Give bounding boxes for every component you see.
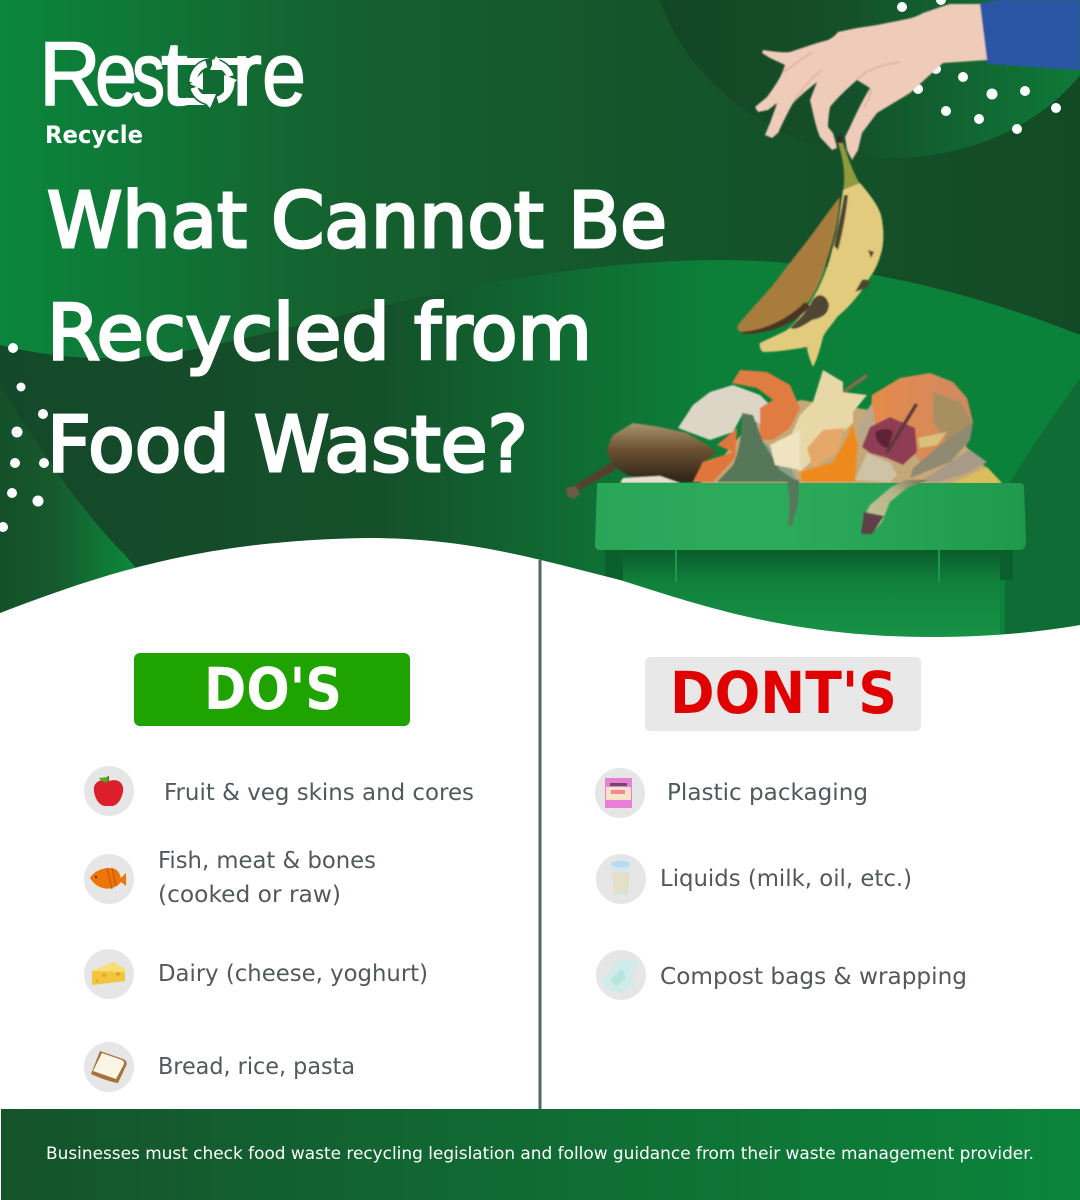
center divider <box>538 560 542 1110</box>
illustration: hand holding banana peel <box>737 0 1080 367</box>
dots: left <box>0 343 49 532</box>
item: compost bags: Compost bags & wrapping <box>660 962 967 990</box>
item: bread <box>84 1042 355 1092</box>
don'ts badge: DONT'S <box>670 659 897 727</box>
do's badge <box>134 653 410 726</box>
item: plastic packaging <box>595 768 868 818</box>
logo: Restore Recycle: s <box>132 24 165 125</box>
logo: Restore Recycle: e <box>262 24 306 125</box>
white lower panel <box>0 538 1080 1200</box>
do's badge: DO'S <box>204 655 342 723</box>
item: compost bags <box>596 950 967 1000</box>
title: Recycled from <box>47 289 592 378</box>
title: Food Waste? <box>47 401 528 490</box>
illustration: food scraps in bin <box>566 370 1002 522</box>
header background <box>0 0 1080 640</box>
item: liquids: Liquids (milk, oil, etc.) <box>660 864 912 892</box>
logo: Restore Recycle <box>39 24 306 149</box>
item: bread: Bread, rice, pasta <box>158 1052 355 1080</box>
logo: Restore Recycle: Recycle <box>45 121 143 149</box>
item: dairy: Dairy (cheese, yoghurt) <box>158 959 428 987</box>
item: fish and meat: Fish, meat & bones <box>158 846 376 874</box>
item: fruit and veg: Fruit & veg skins and cores <box>164 778 474 806</box>
logo: Restore Recycle: t <box>161 24 188 125</box>
title: What Cannot Be <box>47 177 667 266</box>
item: fruit and veg <box>84 766 474 816</box>
logo: Restore Recycle: R <box>39 24 101 125</box>
logo: Restore Recycle: e <box>95 24 137 125</box>
footer <box>1 1109 1080 1200</box>
item: dairy <box>84 949 428 999</box>
item: plastic packaging: Plastic packaging <box>667 778 868 806</box>
logo: Restore Recycle: r <box>232 24 262 125</box>
dots: top right <box>897 0 1061 134</box>
item: fish and meat <box>84 846 376 908</box>
footer: Businesses must check food waste recycling legislation and follow guidance from their waste management provider. <box>46 1144 1034 1164</box>
title <box>47 177 667 490</box>
item: fish and meat: (cooked or raw) <box>158 880 341 908</box>
illustration: green bin <box>595 480 1026 645</box>
item: liquids <box>596 854 912 904</box>
